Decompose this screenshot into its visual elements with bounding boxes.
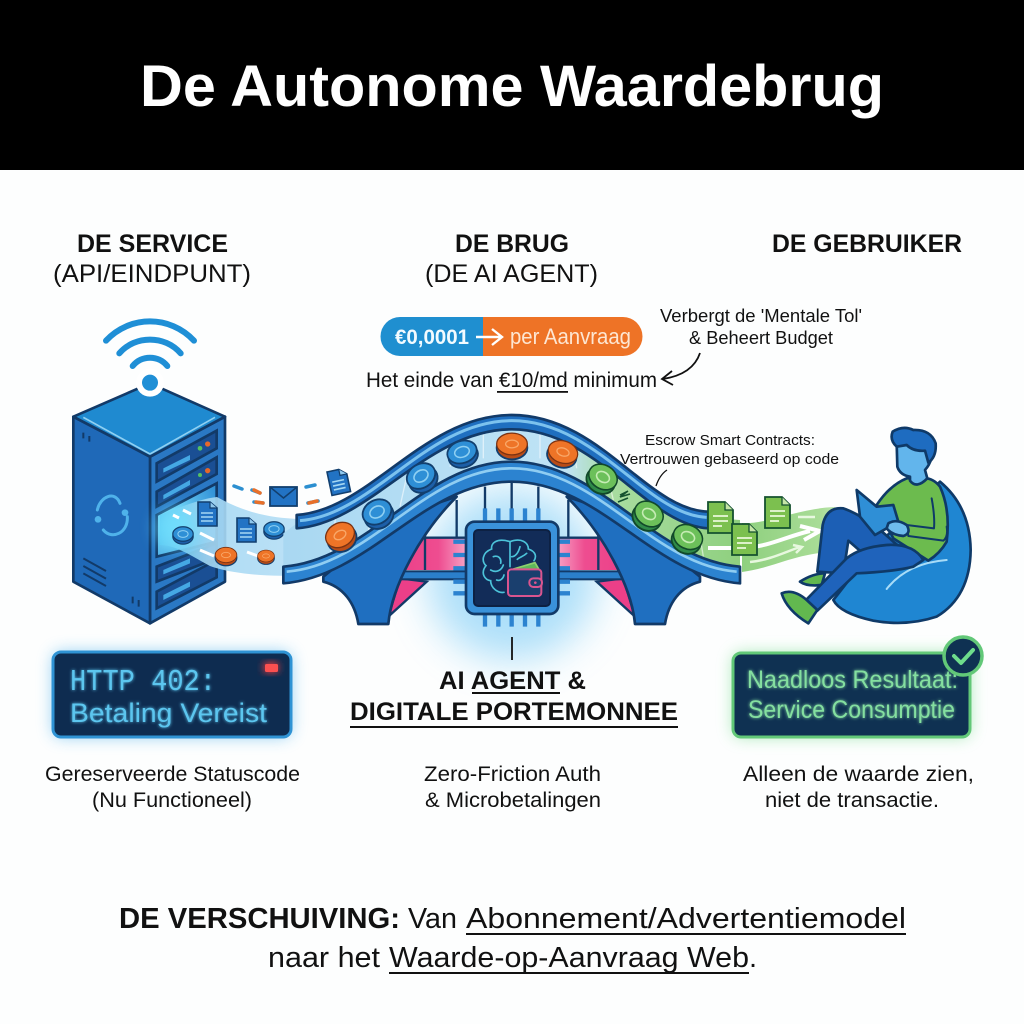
heading: de brug — [425, 230, 598, 288]
status box: HTTP 402 — [53, 652, 291, 737]
deck surface — [283, 423, 740, 567]
text: zero-friction — [424, 763, 601, 812]
heading: de service: (API/EINDPUNT) — [53, 260, 251, 288]
coins on bridge — [321, 433, 707, 559]
right pier — [567, 497, 700, 624]
conclusion: de verschuiving — [119, 903, 906, 974]
text: statuscode — [45, 763, 300, 812]
callout: mentale tol — [660, 306, 862, 348]
icon: server rack — [73, 321, 225, 623]
heading: de brug: DE BRUG — [455, 230, 569, 258]
text: zero-friction: Zero-Friction Auth — [424, 763, 601, 786]
conclusion: de verschuiving: DE VERSCHUIVING: — [119, 903, 400, 935]
hair — [892, 428, 936, 463]
hand — [887, 521, 909, 536]
heading: de brug: (DE AI AGENT) — [425, 260, 598, 288]
connector line — [511, 637, 513, 660]
icon: AI chip met brein en portemonnee — [453, 508, 570, 627]
callout: mentale tol: & Beheert Budget — [689, 328, 833, 348]
status box: naadloos resultaat: Naadloos Resultaat: — [747, 666, 958, 694]
arrow: callout naar minimum — [662, 353, 700, 385]
status box: HTTP 402: Betaling Vereist — [70, 698, 268, 728]
conclusion: de verschuiving: Abonnement/Advertentiemodel — [466, 903, 906, 935]
callout: escrow smart contracts — [620, 433, 839, 486]
back shoe — [800, 573, 825, 585]
heading: de service: DE SERVICE — [77, 230, 228, 258]
price pill: €0,0001 — [395, 326, 469, 349]
conclusion: de verschuiving: . — [749, 942, 757, 974]
status box: naadloos resultaat: Service Consumptie — [748, 696, 955, 724]
heading: de service — [53, 230, 251, 288]
text: statuscode: (Nu Functioneel) — [92, 789, 252, 812]
front shoe — [782, 592, 817, 623]
text: alleen de waarde: niet de transactie. — [765, 789, 939, 812]
led — [264, 663, 278, 672]
icon: gebruiker op zitzak — [782, 428, 971, 623]
text: zero-friction: & Microbetalingen — [425, 789, 601, 812]
tablet — [857, 490, 898, 535]
data stream: service naar brug — [156, 468, 351, 576]
sleeve — [907, 498, 947, 541]
heading: ai agent en portemonnee: AI AGENT & — [439, 667, 586, 695]
back leg — [817, 508, 913, 573]
lower beam — [283, 462, 740, 583]
status box: naadloos resultaat — [733, 637, 982, 737]
price pill — [380, 317, 642, 356]
front leg — [806, 545, 923, 611]
text: einde minimum: Het einde van €10/md minimum — [366, 369, 657, 392]
bridge — [283, 415, 740, 624]
text: alleen de waarde: Alleen de waarde zien, — [743, 763, 974, 786]
price pill: per Aanvraag — [510, 324, 631, 349]
icon: check badge — [944, 637, 982, 675]
conclusion: de verschuiving: Van — [408, 903, 457, 935]
text: alleen de waarde — [743, 763, 974, 812]
torso — [877, 478, 948, 561]
data stream: brug naar gebruiker — [708, 497, 845, 572]
conclusion: de verschuiving: Waarde-op-Aanvraag Web — [389, 942, 749, 974]
icon: envelope — [270, 487, 297, 506]
neck and face — [897, 443, 933, 484]
icon: wifi — [106, 321, 194, 397]
text: statuscode: Gereserveerde Statuscode — [45, 763, 300, 786]
callout: escrow smart contracts: Escrow Smart Contracts: — [645, 433, 815, 449]
glow behind chip — [427, 490, 597, 660]
heading: ai agent en portemonnee — [350, 667, 678, 728]
heading: ai agent en portemonnee: DIGITALE PORTEMONNEE — [350, 698, 678, 726]
heading: de gebruiker: DE GEBRUIKER — [772, 230, 962, 258]
status box: HTTP 402: HTTP 402: — [70, 665, 216, 700]
upper rail — [297, 415, 708, 528]
callout: escrow smart contracts: Vertrouwen gebaseerd op code — [620, 452, 839, 468]
callout: mentale tol: Verbergt de 'Mentale Tol' — [660, 306, 862, 326]
conclusion: de verschuiving: naar het — [268, 942, 380, 974]
title banner: De Autonome Waardebrug — [140, 54, 884, 119]
left pier — [323, 497, 457, 624]
title banner — [0, 0, 1024, 170]
beanbag — [833, 482, 971, 623]
